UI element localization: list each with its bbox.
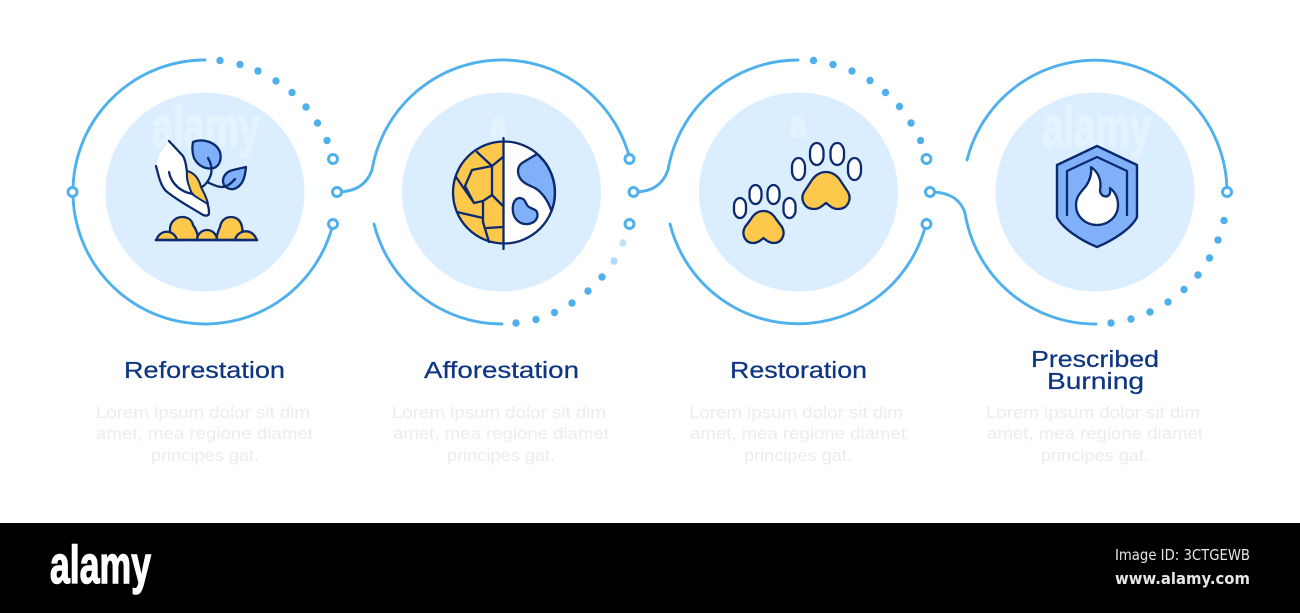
dotted arc: reforestation bbox=[216, 57, 331, 144]
watermark: a bbox=[490, 104, 507, 145]
footer url: www.alamy.com bbox=[1115, 569, 1250, 588]
ring arc with connector: afforestation bbox=[337, 60, 630, 192]
image id: Image ID: 3CTGEWB bbox=[1115, 546, 1250, 564]
panel: afforestation bbox=[332, 60, 634, 465]
inner disc: prescribed burning bbox=[996, 92, 1194, 292]
text block: afforestation: amet, mea regione diamet bbox=[393, 425, 609, 443]
node rings: reforestation bbox=[68, 154, 338, 228]
upper arc: prescribed burning bbox=[967, 60, 1227, 192]
lower arc: restoration bbox=[670, 224, 926, 324]
footer logo: alamy bbox=[50, 536, 151, 595]
inner disc: afforestation bbox=[402, 92, 601, 292]
dotted arc: prescribed burning bbox=[1107, 217, 1228, 327]
inner disc: restoration bbox=[699, 92, 898, 292]
ring arc: reforestation bbox=[73, 60, 333, 324]
text block: prescribed burning: principes gat. bbox=[1041, 447, 1149, 465]
icon: animal paw prints bbox=[734, 143, 861, 243]
text block: reforestation: principes gat. bbox=[151, 447, 259, 465]
heading: prescribed burning bbox=[1031, 346, 1159, 394]
text block: restoration: Lorem ipsum dolor sit dim bbox=[689, 404, 903, 422]
icon: shield with flame bbox=[1057, 146, 1137, 247]
panel: reforestation bbox=[68, 57, 338, 465]
text block: restoration bbox=[689, 404, 906, 465]
inner disc: reforestation bbox=[106, 92, 304, 292]
ring arc with connector: restoration bbox=[634, 60, 798, 192]
dotted arc: afforestation bbox=[512, 239, 627, 327]
text block: reforestation bbox=[96, 404, 313, 465]
panel: restoration bbox=[629, 57, 931, 465]
text block: prescribed burning bbox=[986, 404, 1203, 465]
watermark: alamy bbox=[1042, 95, 1151, 158]
text block: afforestation bbox=[392, 404, 609, 465]
text block: restoration: amet, mea regione diamet bbox=[690, 425, 906, 443]
text block: restoration: principes gat. bbox=[744, 447, 852, 465]
footer bar bbox=[0, 523, 1300, 613]
icon: half cracked half green earth bbox=[452, 138, 555, 249]
text block: reforestation: Lorem ipsum dolor sit dim bbox=[96, 404, 310, 422]
lower arc with connector: prescribed burning bbox=[930, 192, 1096, 324]
heading: reforestation: Reforestation bbox=[124, 357, 285, 383]
text block: prescribed burning: Lorem ipsum dolor sit dim bbox=[986, 404, 1200, 422]
heading: prescribed burning: Burning bbox=[1047, 368, 1144, 394]
watermark: alamy bbox=[152, 95, 260, 158]
watermark: a bbox=[790, 104, 807, 145]
icon: hand planting a sprout bbox=[156, 140, 257, 240]
text block: afforestation: principes gat. bbox=[447, 447, 555, 465]
text block: afforestation: Lorem ipsum dolor sit dim bbox=[392, 404, 606, 422]
node rings: afforestation bbox=[332, 154, 634, 228]
heading: prescribed burning: Prescribed bbox=[1031, 346, 1159, 372]
dotted arc: restoration bbox=[810, 57, 924, 144]
panel: prescribed burning bbox=[926, 60, 1232, 465]
node rings: restoration bbox=[629, 154, 931, 228]
node rings: prescribed burning bbox=[926, 188, 1232, 196]
heading: afforestation: Afforestation bbox=[424, 357, 579, 383]
heading: restoration: Restoration bbox=[730, 357, 867, 383]
text block: reforestation: amet, mea regione diamet bbox=[96, 425, 313, 443]
text block: prescribed burning: amet, mea regione diamet bbox=[987, 425, 1203, 443]
lower arc: afforestation bbox=[374, 224, 502, 324]
